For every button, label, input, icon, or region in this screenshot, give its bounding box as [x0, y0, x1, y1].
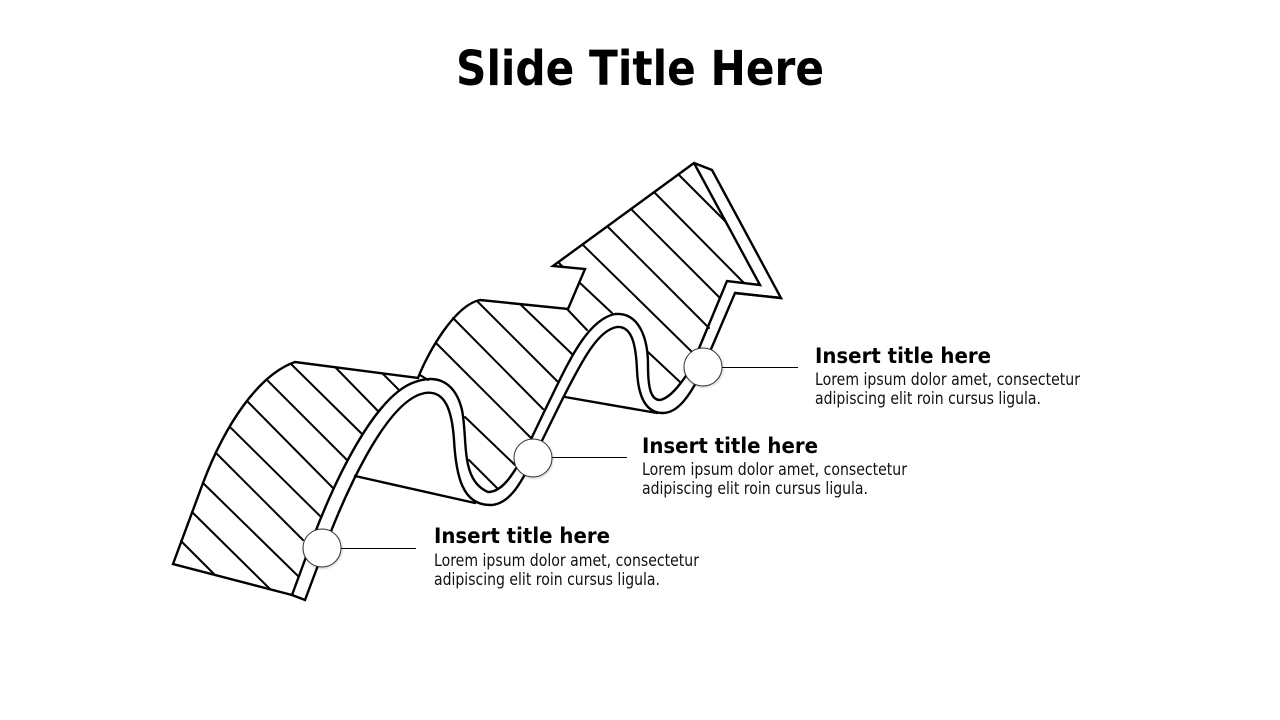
text block 3: adipiscing elit roin cursus ligula.	[815, 389, 1041, 408]
text block 3: Lorem ipsum dolor amet, consectetur	[815, 370, 1080, 389]
text block 2: Insert title here	[642, 434, 818, 458]
lower wall edges	[355, 397, 657, 503]
text block 1: adipiscing elit roin cursus ligula.	[434, 570, 660, 589]
marker 1 with leader	[303, 529, 416, 567]
marker 2 with leader	[514, 439, 627, 477]
text block 1	[434, 524, 699, 589]
text block 2: Lorem ipsum dolor amet, consectetur	[642, 460, 907, 479]
text block 2	[642, 434, 907, 498]
text block 1: Lorem ipsum dolor amet, consectetur	[434, 551, 699, 570]
title: Slide Title Here	[456, 41, 824, 97]
text block 1: Insert title here	[434, 524, 610, 548]
hatch lines	[181, 175, 744, 589]
chart: rising ribbon arrow	[173, 163, 781, 600]
text block 3: Insert title here	[815, 344, 991, 368]
text block 3	[815, 344, 1080, 408]
back wall edges	[173, 163, 781, 595]
ribbon upper edge	[292, 163, 760, 595]
marker 3 with leader	[684, 348, 798, 386]
ribbon lower edge	[292, 293, 781, 600]
text block 2: adipiscing elit roin cursus ligula.	[642, 479, 868, 498]
